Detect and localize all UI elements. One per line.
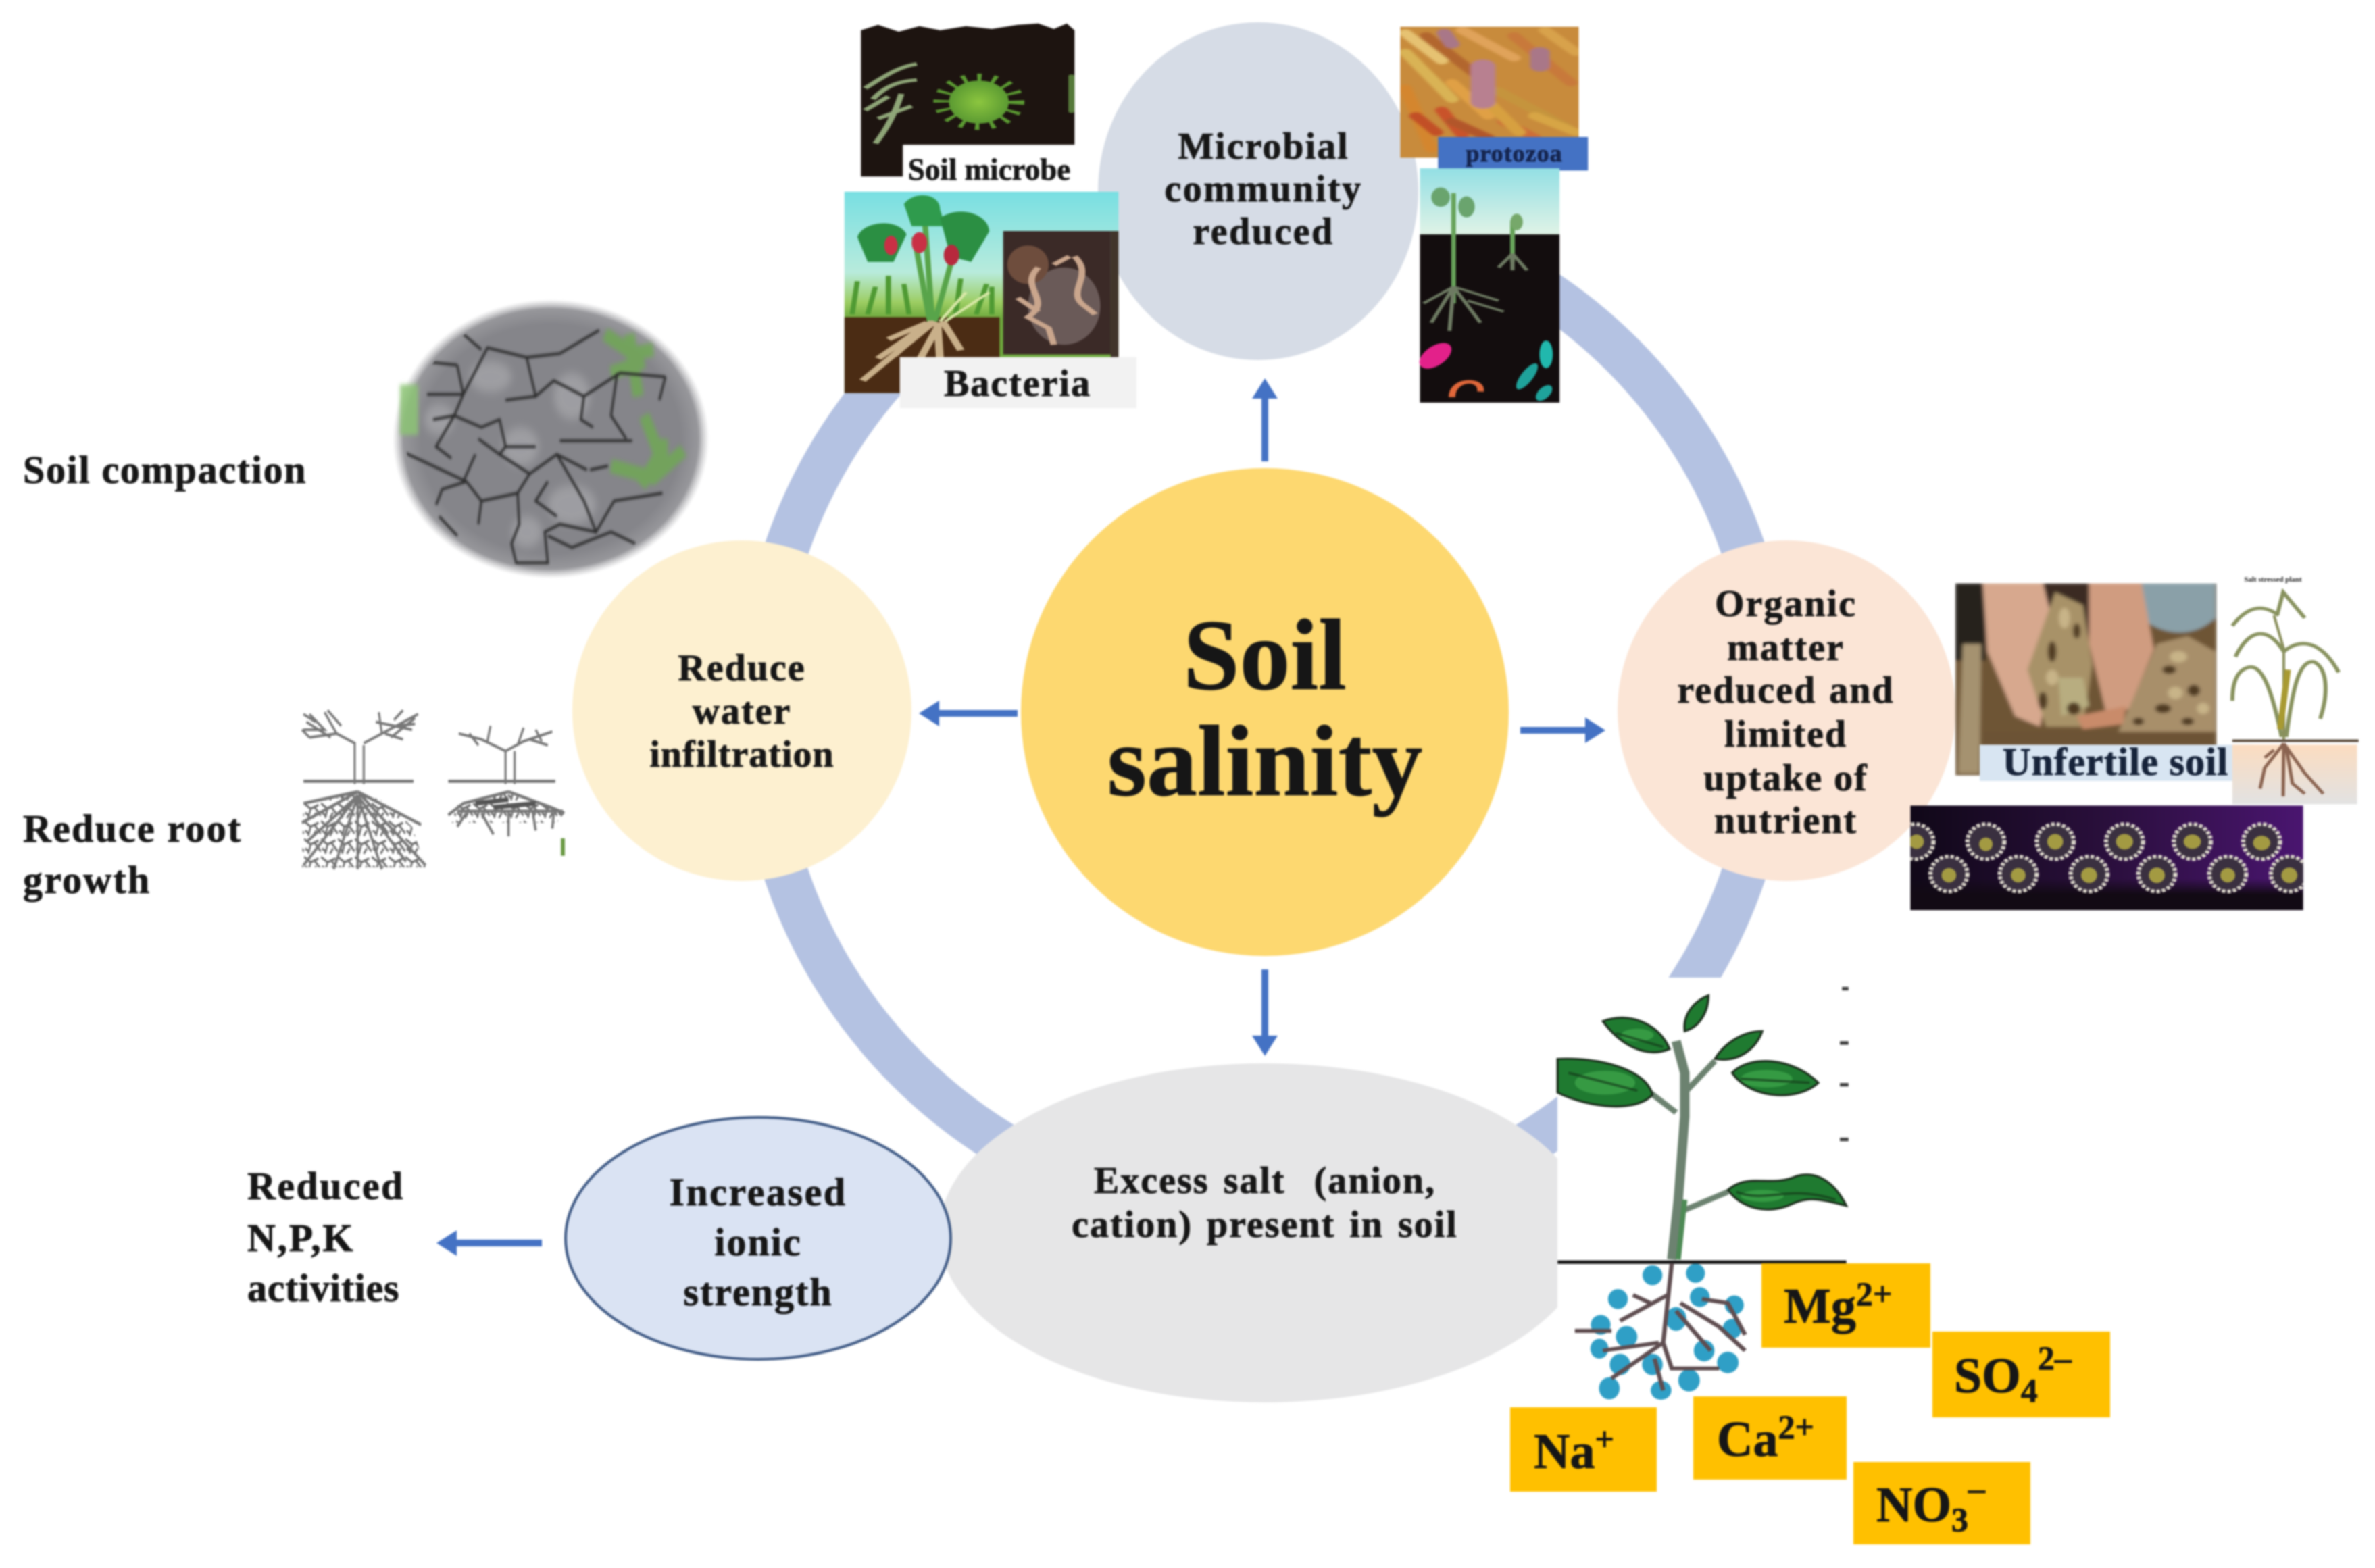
text: reduced NPK activities: Reduced (247, 1164, 405, 1208)
node: excess salt ellipse: cation) present in soil (1072, 1204, 1458, 1246)
arrow: left to reduced NPK (436, 1230, 542, 1256)
image: soil microbe (861, 24, 1095, 191)
ring gap mask near microbial image (1399, 196, 1426, 277)
ion box: SO4 2-: 4 (2021, 1371, 2038, 1409)
plant background mask (1557, 978, 1909, 1410)
text: soil microbe label: Soil microbe (908, 153, 1070, 186)
node: reduce water infiltration: Reduce (678, 647, 806, 689)
text: unfertile soil label: Unfertile soil (2003, 740, 2228, 784)
ion box: SO4 2-: SO (1954, 1348, 2021, 1404)
photo: hands holding soil (1955, 583, 2217, 776)
image: plant roots with microbes (1413, 168, 1559, 403)
ion box: Mg2+: Mg (1784, 1279, 1856, 1334)
ion box: Na+: Na (1534, 1424, 1595, 1480)
node: organic matter reduced: limited (1724, 713, 1847, 755)
arrow: up to microbial (1252, 378, 1278, 461)
text: reduce root growth: Reduce root (23, 807, 242, 851)
text: soil compaction: Soil compaction (23, 448, 307, 492)
node: microbial community reduced: reduced (1193, 211, 1334, 253)
text: protozoa label: protozoa (1466, 140, 1563, 167)
text: reduce root growth (23, 807, 242, 902)
icon: salt stressed plant (2232, 592, 2359, 804)
node: organic matter reduced: matter (1727, 627, 1845, 669)
ion box: Ca2+: Ca (1717, 1412, 1778, 1467)
ion box: Na+: + (1595, 1420, 1614, 1458)
node: reduce water infiltration: infiltration (649, 734, 834, 776)
label box: bacteria (900, 357, 1136, 408)
text: bacteria label: Bacteria (944, 363, 1091, 405)
node: reduce water infiltration: water (693, 690, 791, 732)
central circle: soil salinity (1021, 468, 1509, 956)
node: excess salt ellipse: Excess salt (anion, (1094, 1160, 1436, 1202)
ion box: SO4 2-: 2– (2038, 1339, 2072, 1377)
ion box: SO4 2- (1932, 1332, 2110, 1417)
ion box: NO3-: 3 (1951, 1500, 1968, 1538)
label: soil microbe (903, 145, 1095, 191)
ion box: Mg2+ (1761, 1263, 1930, 1348)
node: organic matter reduced: nutrient (1714, 800, 1857, 842)
image: unfertile soil and nutrients (1897, 583, 2359, 910)
text: reduced NPK activities: N,P,K (247, 1216, 355, 1260)
ring: connecting circle (759, 207, 1770, 1217)
node: increased ionic strength: Increased (669, 1170, 847, 1214)
arrow: left to water infiltration (919, 701, 1018, 726)
arrow: down to excess salt (1252, 969, 1278, 1056)
image: root growth comparison (302, 710, 564, 869)
node: microbial community reduced: Microbial (1178, 126, 1349, 168)
ion box: NO3- (1853, 1462, 2030, 1544)
node: increased ionic strength: strength (683, 1270, 833, 1314)
text: reduced NPK activities (247, 1164, 405, 1310)
node: microbial community reduced: community (1164, 168, 1363, 210)
ion box: Ca2+: 2+ (1778, 1408, 1814, 1446)
strip: nutrient elements (1897, 805, 2308, 910)
icon: healthy plant with dense roots (302, 710, 426, 869)
arrow: right to organic matter (1520, 717, 1605, 743)
node: organic matter reduced (1618, 540, 1955, 881)
label box: protozoa (1438, 137, 1588, 170)
central circle: soil salinity: Soil (1183, 599, 1347, 711)
label box: unfertile soil (1980, 744, 2254, 781)
node: organic matter reduced: reduced and (1677, 669, 1895, 711)
node: organic matter reduced: Organic (1715, 583, 1857, 625)
central circle: soil salinity: salinity (1107, 705, 1422, 817)
icon: plant with reduced roots (448, 726, 564, 836)
decorative green mark (559, 838, 568, 856)
node: excess salt ellipse (939, 1063, 1591, 1402)
text: reduced NPK activities: activities (247, 1266, 399, 1310)
text: reduce root growth: growth (23, 858, 151, 902)
ion box: Na+ (1510, 1407, 1657, 1492)
image: bacteria plant and earthworm (845, 192, 1136, 408)
ion box: NO3-: – (1968, 1469, 1986, 1507)
node: increased ionic strength: ionic (714, 1220, 802, 1264)
image: cracked soil (393, 299, 709, 578)
node: microbial community reduced (1098, 22, 1418, 360)
node: increased ionic strength (566, 1117, 951, 1359)
node: reduce water infiltration (572, 540, 911, 881)
ion box: NO3-: NO (1876, 1477, 1951, 1533)
ion box: Ca2+ (1693, 1396, 1847, 1480)
text: small plant caption: Salt stressed plant (2244, 576, 2302, 584)
node: organic matter reduced: uptake of (1703, 757, 1868, 799)
ion box: Mg2+: 2+ (1856, 1275, 1892, 1313)
image: protozoa (1400, 27, 1588, 170)
image: plant with ions at roots (1557, 988, 1849, 1400)
